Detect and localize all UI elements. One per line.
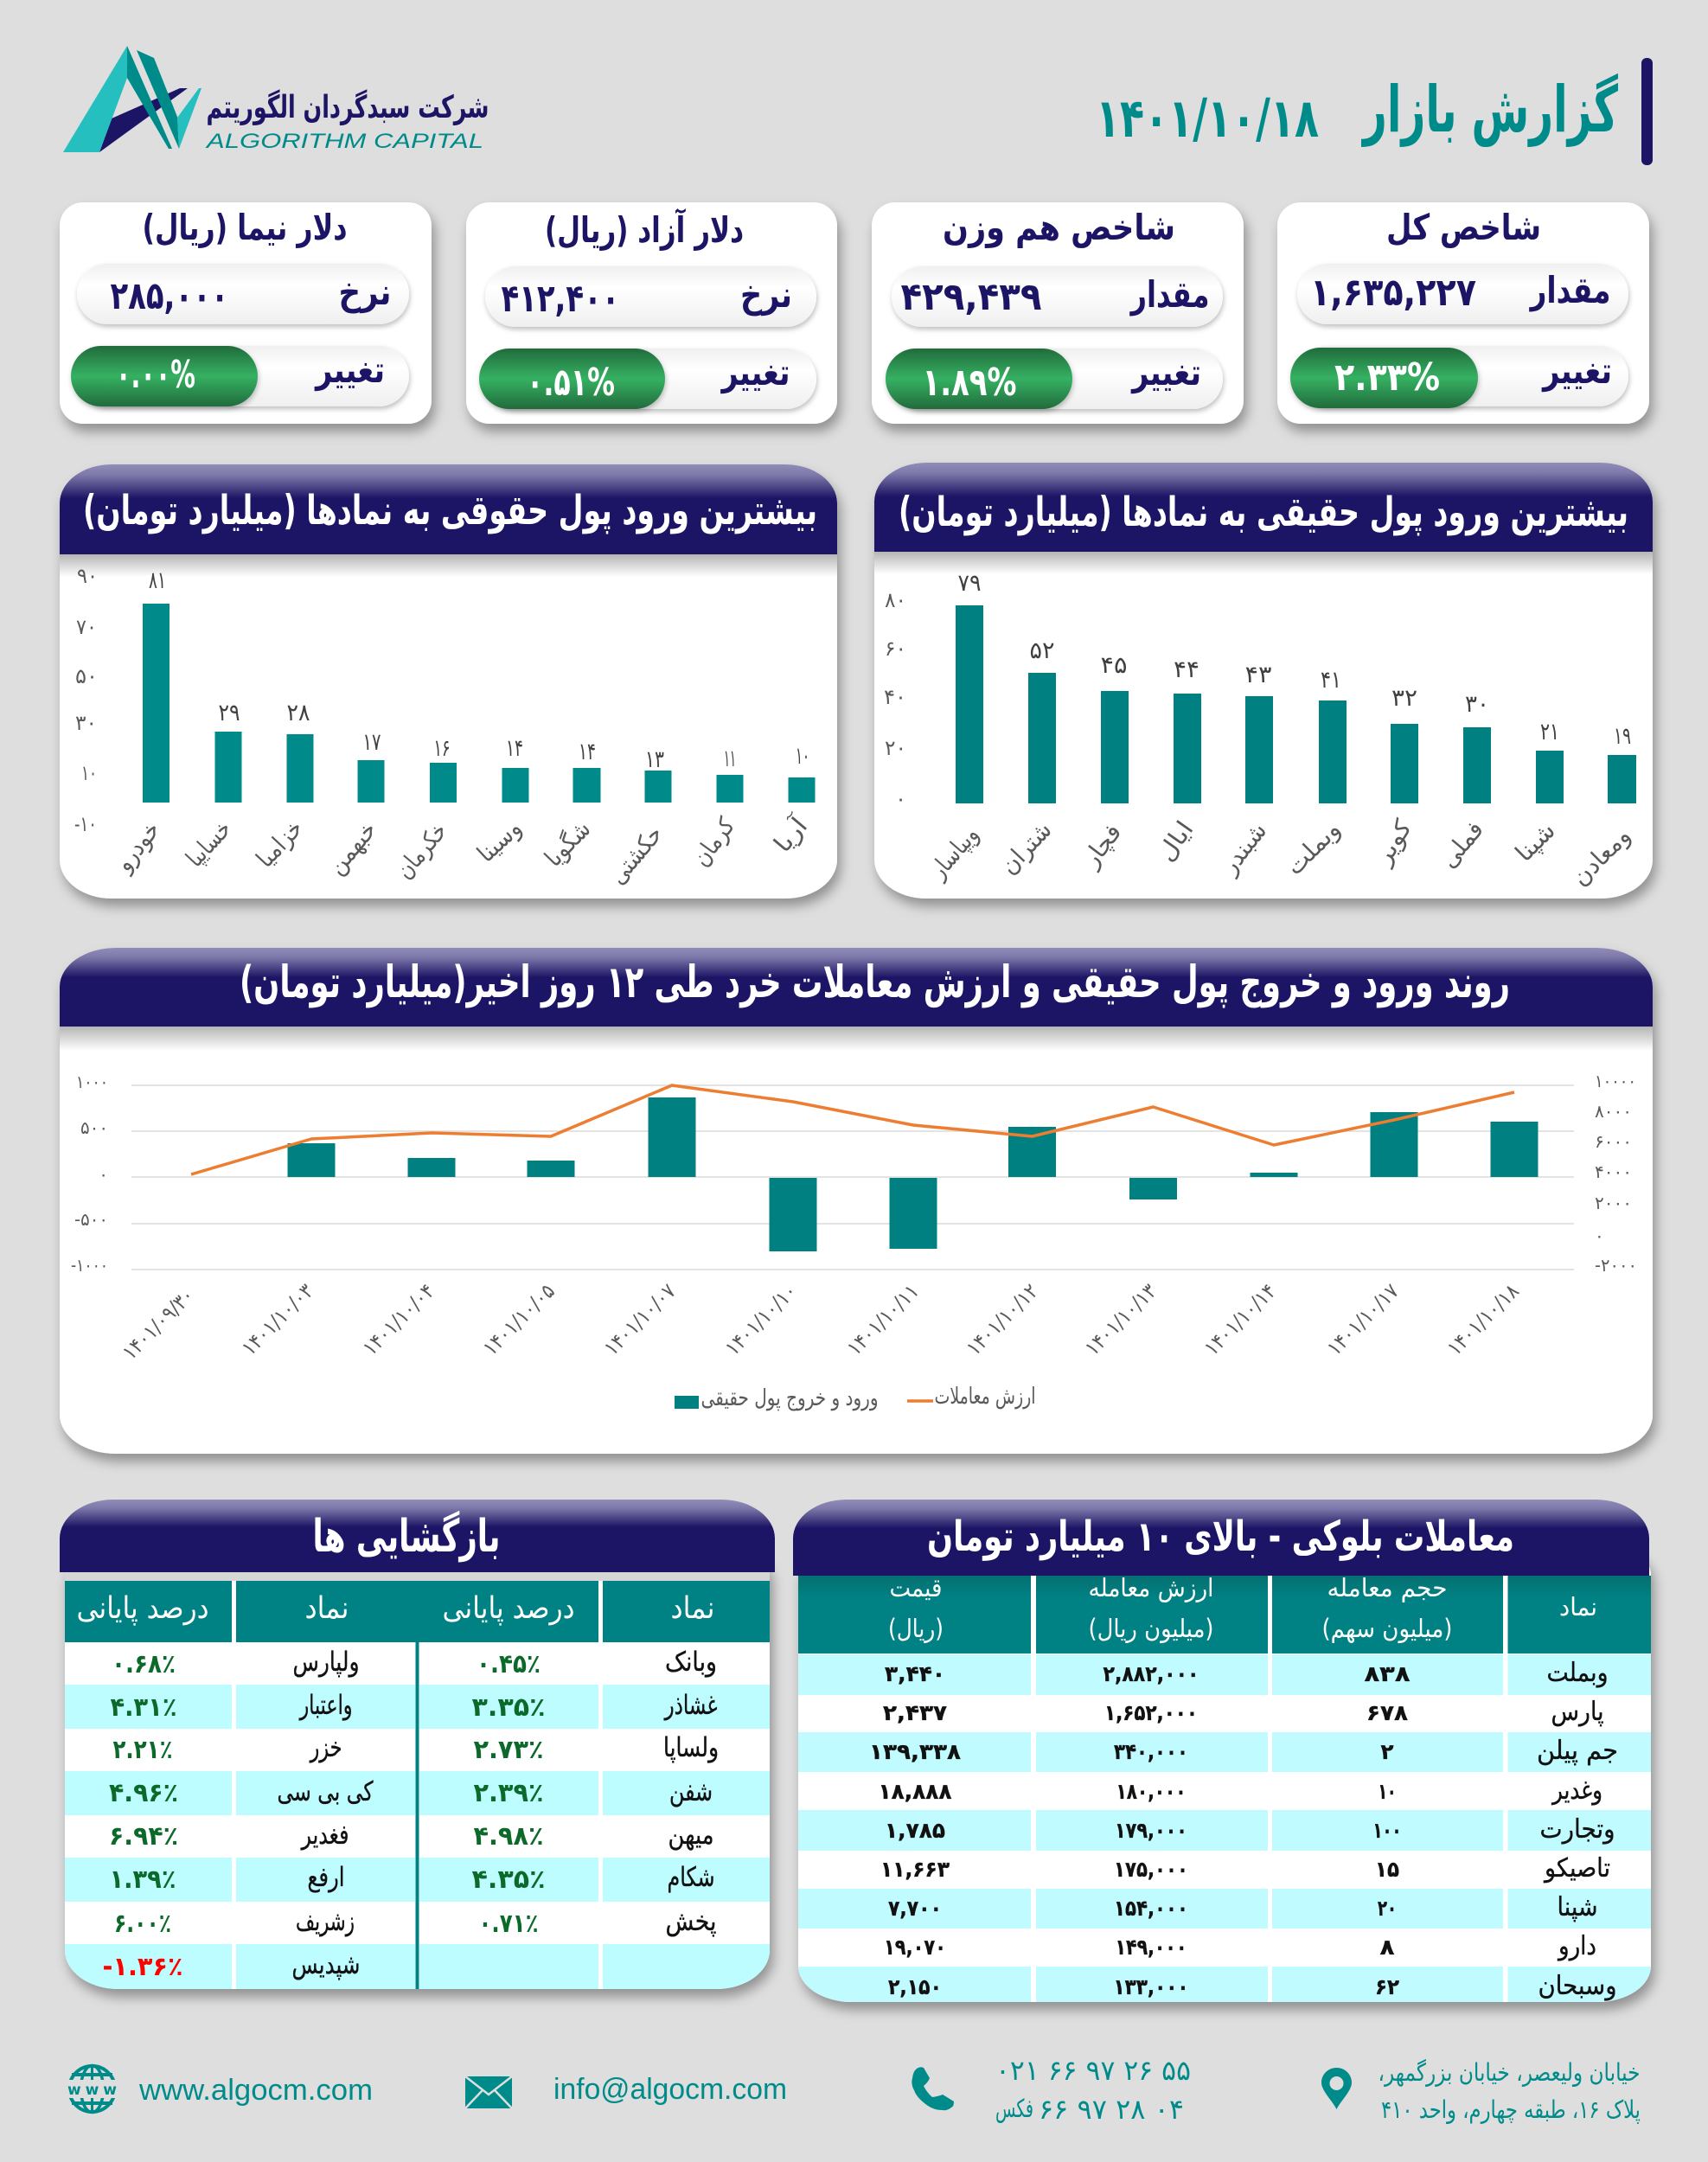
category labels: ومعادن [1566,822,1636,892]
value labels: ۸۱ [149,567,166,594]
table header labels: درصد پایانی [76,1591,209,1626]
date labels: ۱۴۰۱/۰۹/۳۰ [118,1283,199,1365]
y axis labels: ۳۰ [75,711,97,735]
legend: ورود و خروج پول حقیقی [700,1385,879,1411]
table value column: ۱۷۵,۰۰۰ [1114,1857,1188,1882]
logo: Algorithm Capital: شرکت سبدگردان الگوریتم [206,89,489,125]
category labels: فچار [1075,818,1127,874]
percent column right [472,1649,545,1939]
symbols column right: وبانک [665,1647,717,1678]
table symbols column: تاصیکو [1543,1853,1610,1884]
value labels: ۲۹ [218,700,240,726]
card: شاخص هم وزن: ۴۲۹,۴۳۹ [901,275,1041,319]
value labels: ۲۱ [1540,719,1559,745]
panel: right bar chart (حقیقی) [874,463,1653,899]
right axis labels: ۲۰۰۰ [1595,1193,1632,1213]
table header labels [888,1573,1597,1644]
footer: website: www [67,2082,117,2099]
date labels: ۱۴۰۱/۱۰/۱۷ [1322,1279,1404,1360]
table volume column [1365,1661,1410,1999]
value labels: ۲۸ [287,700,310,726]
table backgrounds [65,1581,770,1989]
card: دلار نیما: تغییر [314,349,385,392]
date labels: ۱۴۰۱/۱۰/۰۵ [478,1279,560,1360]
card: دلار آزاد: ۴۱۲,۴۰۰ [502,277,619,321]
value labels: ۷۹ [958,570,981,597]
table header labels: حجم معامله [1327,1573,1448,1603]
card: دلار نیما: دلار نیما (ریال) [142,207,348,248]
table volume column: ۱۵ [1375,1857,1399,1882]
table value column: ۱۳۳,۰۰۰ [1114,1974,1188,1999]
legend: ارزش معاملات [934,1384,1036,1410]
card: شاخص هم وزن: ۱.۸۹% [922,361,1017,405]
table price column: ۱۸,۸۸۸ [879,1779,951,1804]
category labels: حکشتی [603,820,668,890]
card: دلار آزاد: نرخ [740,273,792,317]
left axis labels: -۱۰۰۰ [71,1255,108,1276]
y axis labels: ۵۰ [75,664,98,688]
y axis labels: ۷۰ [76,615,97,639]
left axis labels: -۵۰۰ [74,1209,108,1230]
table price column: ۱۹,۰۷۰ [884,1935,946,1960]
table value column: ۱۸۰,۰۰۰ [1116,1779,1187,1804]
table price column: ۱۳۹,۳۳۸ [869,1739,961,1764]
table header labels: قیمت [889,1573,943,1602]
legend [675,1384,1036,1411]
category labels: شپنا [1510,816,1561,867]
date labels: ۱۴۰۱/۱۰/۱۰ [720,1279,802,1360]
percent column right: ۴.۳۵٪ [472,1865,545,1895]
table volume column: ۶۲ [1375,1974,1399,1999]
table volume column: ۱۰ [1379,1779,1396,1804]
symbols column right: میهن [668,1820,714,1851]
table volume column: ۲ [1380,1739,1394,1764]
category labels: ایال [1151,816,1199,867]
table header labels: (میلیون ریال) [1088,1614,1214,1643]
symbols column right: شکام [668,1862,714,1893]
date labels: ۱۴۰۱/۱۰/۰۳ [237,1279,318,1360]
table price column: ۱۱,۶۶۳ [880,1857,950,1882]
category labels: خزامیا [251,814,309,873]
table header labels: نماد [1559,1592,1597,1622]
date labels: ۱۴۰۱/۱۰/۰۴ [358,1279,439,1360]
percent column left: ۱.۳۹٪ [109,1865,176,1895]
bars: net real money flow [287,1097,1538,1251]
footer: phone: ۶۶ ۹۷ ۲۸ ۰۴ [1039,2093,1184,2126]
value labels: ۱۴ [579,739,596,765]
y axis labels: ۶۰ [885,636,906,661]
category labels: کویر [1367,814,1418,871]
table price column: ۲,۱۵۰ [888,1974,942,1999]
y axis labels: ۹۰ [77,564,98,588]
symbols column left: فغدیر [300,1820,349,1851]
table header labels: نماد [671,1591,714,1626]
table value column: ۱,۶۵۲,۰۰۰ [1104,1700,1198,1725]
percent column right: ۰.۴۵٪ [477,1649,541,1679]
footer: address: پلاک ۱۶، طبقه چهارم، واحد ۴۱۰ [1381,2095,1641,2124]
table rows backgrounds [798,1576,1651,2002]
symbols column right: غشاذر [663,1690,718,1721]
footer: website: www.algocm.com [138,2074,373,2107]
y axis labels: ۰ [895,787,906,811]
panel: left bar chart (حقوقی): بیشترین ورود پول حقوقی به نمادها (میلیارد تومان) [83,487,817,534]
date labels: ۱۴۰۱/۱۰/۰۷ [599,1279,681,1360]
percent column right: ۴.۹۸٪ [474,1821,543,1852]
category labels: آریا [768,811,814,858]
y axis labels: ۸۰ [885,588,906,612]
footer: phone [912,2054,1191,2126]
percent column left: -۱.۳۶٪ [102,1952,183,1982]
y axis labels [884,588,906,811]
table symbols column: وبملت [1546,1658,1609,1688]
category labels: ویپاسار [923,820,984,885]
table price column: ۱,۷۸۵ [885,1818,945,1843]
table symbols column: وتجارت [1539,1814,1615,1845]
card: دلار نیما: نرخ [339,271,391,314]
card: شاخص کل: ۱,۶۳۵,۲۲۷ [1310,271,1476,315]
panel: left bar chart (حقوقی) [60,464,837,899]
value labels: ۱۳ [645,746,664,773]
left axis labels: ۰ [99,1164,108,1185]
percent column left: ۴.۳۱٪ [111,1692,176,1723]
bars [956,605,1636,803]
percent column left: ۰.۶۸٪ [112,1649,176,1679]
table price column [869,1661,961,1999]
y axis labels [74,564,98,836]
value labels: ۳۲ [1391,685,1417,712]
date labels: ۱۴۰۱/۱۰/۱۴ [1199,1279,1281,1360]
table value column: ۱۷۹,۰۰۰ [1115,1818,1187,1843]
symbols column left: ولپارس [292,1647,360,1678]
left axis labels: ۵۰۰ [80,1117,108,1138]
footer: email: info@algocm.com [553,2073,787,2106]
category labels [923,814,1636,892]
right axis labels: -۲۰۰۰ [1595,1255,1637,1276]
symbols column right: پخش [666,1906,716,1937]
card: دلار آزاد: تغییر [720,351,790,394]
card: دلار آزاد: دلار آزاد (ریال) [545,208,744,251]
value labels [149,567,809,773]
line: trade value [191,1085,1514,1174]
title block: ۱۴۰۱/۱۰/۱۸ [1096,86,1319,150]
title block [1096,58,1653,165]
card: شاخص هم وزن: شاخص هم وزن [943,207,1175,249]
date labels: ۱۴۰۱/۱۰/۱۱ [842,1279,924,1360]
category labels: خودرو [108,816,166,878]
panel: trend chart [60,948,1653,1454]
table symbols column: جم پیلن [1537,1736,1618,1766]
table value column: ۳۴۰,۰۰۰ [1114,1739,1188,1764]
table volume column: ۸۳۸ [1365,1661,1410,1686]
table header labels: نماد [304,1591,349,1626]
percent column right: ۲.۳۹٪ [474,1778,543,1808]
value labels: ۱۷ [363,729,381,756]
symbols column right [663,1647,719,1937]
category labels: وبملت [1280,815,1346,880]
value labels: ۴۴ [1174,656,1199,683]
percent column left: ۶.۰۰٪ [114,1909,171,1939]
left axis labels [71,1071,108,1276]
footer: phone: ۰۲۱ ۶۶ ۹۷ ۲۶ ۵۵ [995,2054,1191,2087]
panel: block trades table [793,1500,1651,2002]
card: شاخص کل: شاخص کل [1386,207,1541,248]
table symbols column: شپنا [1557,1892,1598,1922]
right axis labels [1595,1071,1637,1276]
value labels: ۱۴ [506,735,523,762]
y axis labels: ۴۰ [884,685,906,709]
table value column: ۱۵۴,۰۰۰ [1114,1896,1188,1921]
right axis labels: ۱۰۰۰۰ [1595,1071,1636,1091]
card: دلار نیما: ۲۸۵,۰۰۰ [111,274,228,318]
category labels: خسایپا [180,815,237,873]
table price column: ۳,۴۴۰ [885,1661,945,1686]
symbols column right: ولساپا [663,1732,719,1763]
date labels: ۱۴۰۱/۱۰/۱۸ [1443,1279,1524,1360]
symbols column left: ارفع [308,1862,344,1893]
percent column right: ۳.۳۵٪ [472,1692,545,1723]
card: دلار نیما: ۰.۰۰% [116,353,195,397]
right axis labels: ۶۰۰۰ [1595,1131,1632,1152]
table header labels [76,1591,714,1626]
bars [143,604,815,803]
panel: reopening table [60,1500,775,1989]
table price column: ۲,۴۳۷ [883,1700,947,1725]
value labels [958,570,1631,750]
card: شاخص هم وزن: تغییر [1130,351,1201,394]
y axis labels: ۲۰ [885,736,906,760]
card: شاخص کل [1277,202,1649,424]
card: شاخص کل: ۲.۳۳% [1334,355,1440,400]
card: دلار آزاد: ۰.۵۱% [527,361,615,405]
percent column left: ۶.۹۴٪ [109,1821,178,1852]
card: شاخص کل: مقدار [1529,269,1610,311]
panel: reopening table: بازگشایی ها [313,1510,500,1563]
category labels: خکرمان [390,816,453,884]
footer: email [465,2073,787,2108]
value labels: ۳۰ [1465,691,1489,718]
table volume column: ۸ [1380,1935,1394,1960]
table symbols column: وسبحان [1538,1971,1617,2001]
right axis labels: ۸۰۰۰ [1595,1101,1632,1122]
value labels: ۴۱ [1321,667,1341,694]
right axis labels: ۰ [1595,1225,1604,1246]
y axis labels: ۱۰ [81,761,97,785]
date labels: ۱۴۰۱/۱۰/۱۳ [1080,1279,1161,1360]
symbols column left: واعتبار [298,1690,353,1721]
symbols column left: شپدیس [292,1949,360,1980]
table symbols column [1537,1658,1618,2001]
footer: address [1321,2058,1641,2124]
date labels: ۱۴۰۱/۱۰/۱۲ [962,1279,1043,1360]
table header labels: (میلیون سهم) [1321,1614,1453,1644]
footer: address: خیابان ولیعصر، خیابان بزرگمهر، [1379,2058,1640,2087]
value labels: ۵۲ [1029,637,1055,664]
value labels: ۱۰ [796,743,809,770]
percent column left [102,1649,183,1982]
table volume column: ۶۷۸ [1366,1700,1408,1725]
right axis labels: ۴۰۰۰ [1595,1161,1632,1182]
value labels: ۴۵ [1100,652,1128,679]
value labels: ۱۹ [1614,723,1631,750]
category labels: شبندر [1214,816,1272,880]
category labels: وسینا [471,814,527,868]
panel: block trades table: معاملات بلوکی - بالای ۱۰ میلیارد تومان [927,1513,1514,1561]
table header labels: (ریال) [888,1614,944,1643]
symbols column left: زشریف [296,1906,355,1937]
percent column right: ۰.۷۱٪ [479,1909,538,1939]
symbols column right: شفن [669,1776,713,1807]
category labels: شگویا [539,815,596,873]
symbols column left [277,1647,374,1980]
y axis labels: -۱۰ [74,812,97,836]
table value column: ۱۴۹,۰۰۰ [1116,1935,1187,1960]
logo: Algorithm Capital [63,46,489,153]
category labels: خبهمن [322,816,382,880]
table volume column: ۲۰ [1378,1896,1397,1921]
table symbols column: پارس [1551,1697,1603,1727]
footer: website [64,2065,373,2112]
card: شاخص هم وزن: مقدار [1129,273,1209,316]
category labels: کرمان [687,812,741,872]
symbols column left: کی بی سی [277,1776,374,1807]
category labels [108,811,814,890]
percent column right: ۲.۷۳٪ [474,1735,543,1765]
footer: phone: فکس [995,2094,1033,2123]
card: دلار نیما [60,202,432,424]
table header labels: ارزش معامله [1088,1573,1214,1602]
left axis labels: ۱۰۰۰ [76,1071,108,1092]
symbols column left: خزر [309,1732,342,1763]
table value column [1103,1661,1199,1999]
table value column: ۲,۸۸۲,۰۰۰ [1103,1661,1199,1686]
percent column left: ۴.۹۶٪ [109,1778,178,1808]
percent column left: ۲.۲۱٪ [112,1735,173,1765]
date labels [118,1279,1524,1365]
logo: Algorithm Capital: ALGORITHM CAPITAL [204,130,483,153]
card: شاخص کل: تغییر [1541,349,1612,393]
table volume column: ۱۰۰ [1373,1818,1401,1843]
table header labels: درصد پایانی [443,1591,574,1626]
card: دلار آزاد [466,202,837,424]
category labels: فملی [1434,816,1489,873]
value labels: ۴۳ [1245,662,1271,688]
table symbols column: وغدیر [1551,1775,1602,1806]
card: شاخص هم وزن [872,202,1244,424]
category labels: شتران [995,816,1057,880]
value labels: ۱۶ [434,735,450,762]
value labels: ۱۱ [724,745,736,772]
table symbols column: دارو [1557,1931,1596,1961]
table price column: ۷,۷۰۰ [888,1896,942,1921]
